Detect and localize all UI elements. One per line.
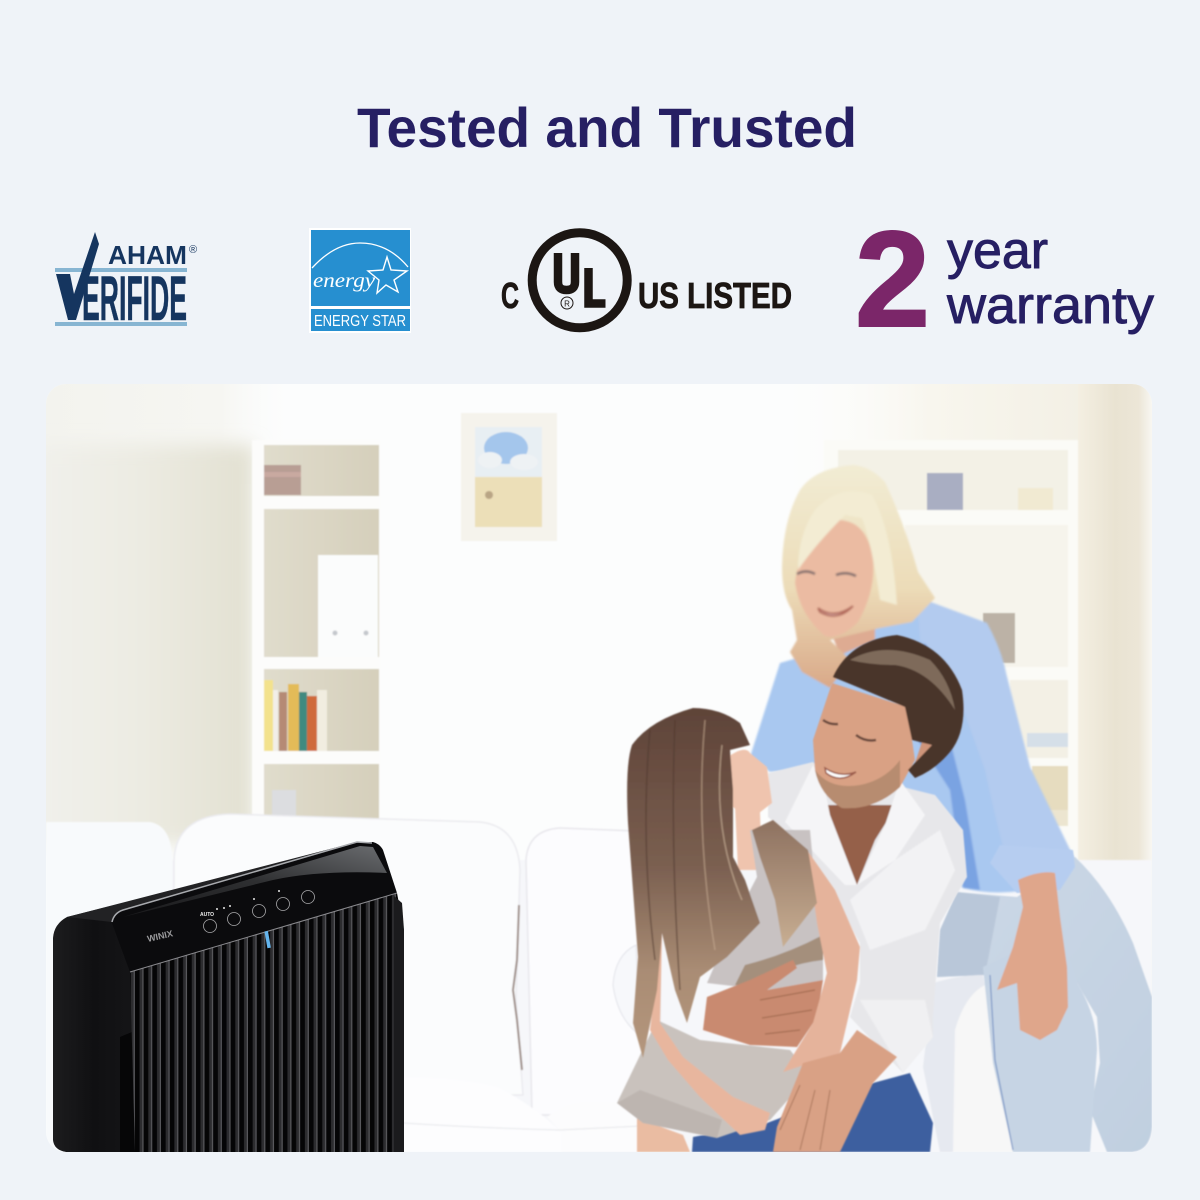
logo: Energy Star: ENERGY STAR bbox=[314, 313, 406, 330]
air purifier bbox=[53, 842, 404, 1152]
logo: AHAM Verifide: ® bbox=[189, 244, 197, 256]
woman: face bbox=[795, 520, 873, 637]
purifier: ribbed front bbox=[130, 893, 404, 1152]
purifier: AUTO label: AUTO bbox=[200, 912, 214, 918]
text: ERIFIDE bbox=[82, 264, 187, 334]
man: jeans bbox=[692, 1073, 933, 1152]
warranty label: year bbox=[947, 222, 1048, 280]
photo: family in living room with air purifier bbox=[30, 384, 1152, 1160]
logo: UL listed: R bbox=[564, 300, 570, 308]
girl: arm on man bbox=[783, 850, 860, 1072]
purifier: WINIX brand: WINIX bbox=[146, 928, 174, 944]
man: white shirt bbox=[768, 762, 967, 1073]
purifier: top vent bbox=[67, 842, 372, 922]
man: collar bbox=[785, 765, 925, 885]
man: hair bbox=[833, 635, 964, 778]
girl: hair strands bbox=[646, 720, 742, 990]
right bookshelf bbox=[824, 440, 1078, 870]
woman: jeans and sofa arm bbox=[923, 845, 1152, 1152]
girl: neck bbox=[735, 805, 762, 870]
woman: lower leg bbox=[984, 966, 1098, 1152]
wall picture bbox=[461, 413, 557, 541]
man bbox=[613, 635, 967, 1152]
logo: 2 year warranty bbox=[855, 203, 1154, 355]
left bookshelf bbox=[252, 440, 380, 830]
man: face bbox=[812, 682, 916, 788]
logo: AHAM Verifide bbox=[55, 232, 197, 334]
logo: AHAM Verifide: AHAM bbox=[108, 240, 187, 270]
man: forearm and hand bbox=[773, 1030, 897, 1152]
girl bbox=[617, 708, 897, 1152]
logo: UL listed: US LISTED bbox=[638, 275, 792, 316]
woman: hair bbox=[782, 465, 935, 688]
purifier: right edge bbox=[394, 896, 404, 1152]
girl: bodice bbox=[707, 830, 823, 990]
man: chest bbox=[827, 805, 897, 885]
warranty numeral: 2 bbox=[855, 203, 930, 355]
logo: UL listed bbox=[501, 233, 792, 328]
white sofa bbox=[46, 814, 1152, 1160]
woman: hand bbox=[997, 872, 1068, 1040]
woman: cuff bbox=[990, 845, 1075, 893]
woman: shirt bbox=[750, 597, 1075, 892]
girl: leg bbox=[637, 1118, 690, 1152]
man: shirt sleeve behind girl bbox=[613, 945, 640, 1035]
woman: neck bbox=[832, 628, 876, 654]
sofa arm bbox=[923, 976, 984, 1152]
logo: Energy Star bbox=[309, 228, 411, 333]
logo: Energy Star: energy bbox=[313, 270, 375, 292]
purifier: blue light bbox=[264, 931, 271, 948]
woman: thigh bbox=[968, 857, 1152, 1152]
logo: UL listed: C bbox=[501, 275, 519, 316]
woman: features bbox=[797, 572, 856, 616]
purifier: indicator dots bbox=[216, 890, 280, 910]
girl: skirt bbox=[617, 1020, 810, 1138]
girl: shoulder hair bbox=[752, 820, 817, 947]
purifier: gloss bbox=[123, 846, 387, 917]
girl: face bbox=[730, 749, 772, 813]
man: features bbox=[823, 720, 876, 778]
girl: main hair bbox=[627, 708, 760, 1058]
girl: arm by side bbox=[650, 933, 770, 1135]
purifier: buttons bbox=[204, 890, 314, 932]
warranty label bbox=[946, 222, 1154, 335]
title: Tested and Trusted bbox=[357, 96, 857, 159]
man: hand on girl's waist bbox=[703, 960, 823, 1047]
purifier: control panel bbox=[112, 842, 397, 972]
warranty label: warranty bbox=[946, 277, 1154, 335]
purifier: side body bbox=[53, 900, 135, 1152]
woman bbox=[750, 465, 1075, 892]
room wall bbox=[46, 384, 1152, 860]
woman: fringe bbox=[797, 506, 898, 606]
